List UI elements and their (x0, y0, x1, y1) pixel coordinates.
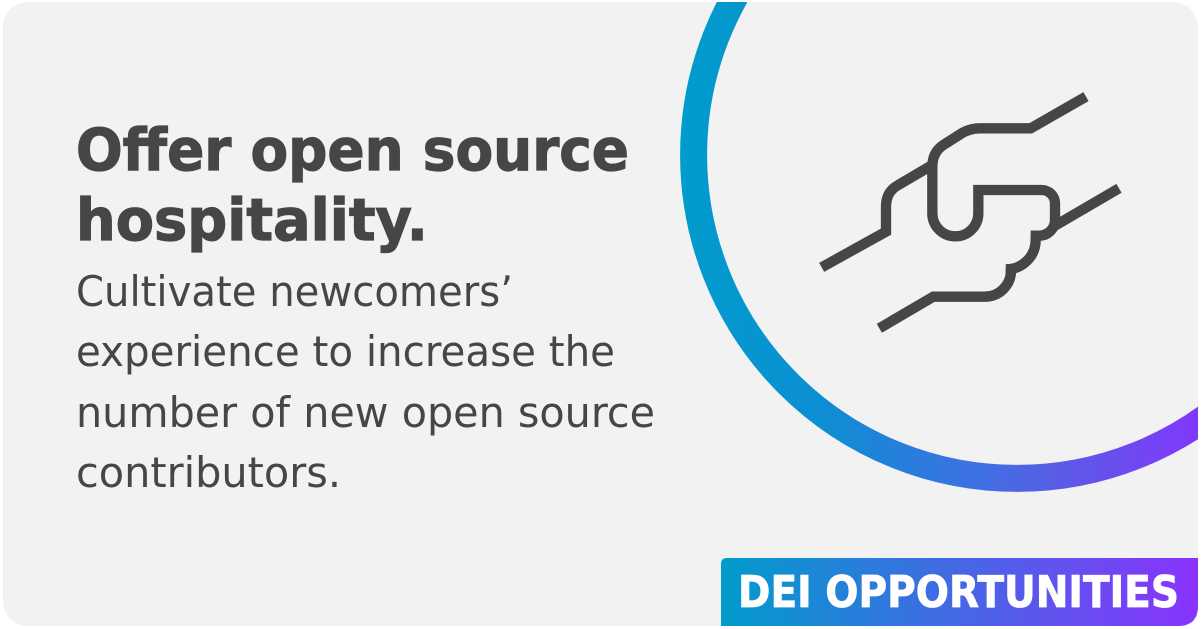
ring arc (694, 0, 1201, 478)
body text (76, 267, 655, 497)
heading (76, 116, 629, 254)
heading: Offer open source (76, 116, 629, 184)
badge (721, 558, 1198, 626)
body text: contributors. (76, 448, 341, 497)
body text: Cultivate newcomers’ (76, 267, 513, 316)
icon: handshake (822, 97, 1119, 328)
body text: experience to increase the (76, 327, 615, 376)
heading: hospitality. (76, 186, 428, 254)
body text: number of new open source (76, 388, 655, 437)
